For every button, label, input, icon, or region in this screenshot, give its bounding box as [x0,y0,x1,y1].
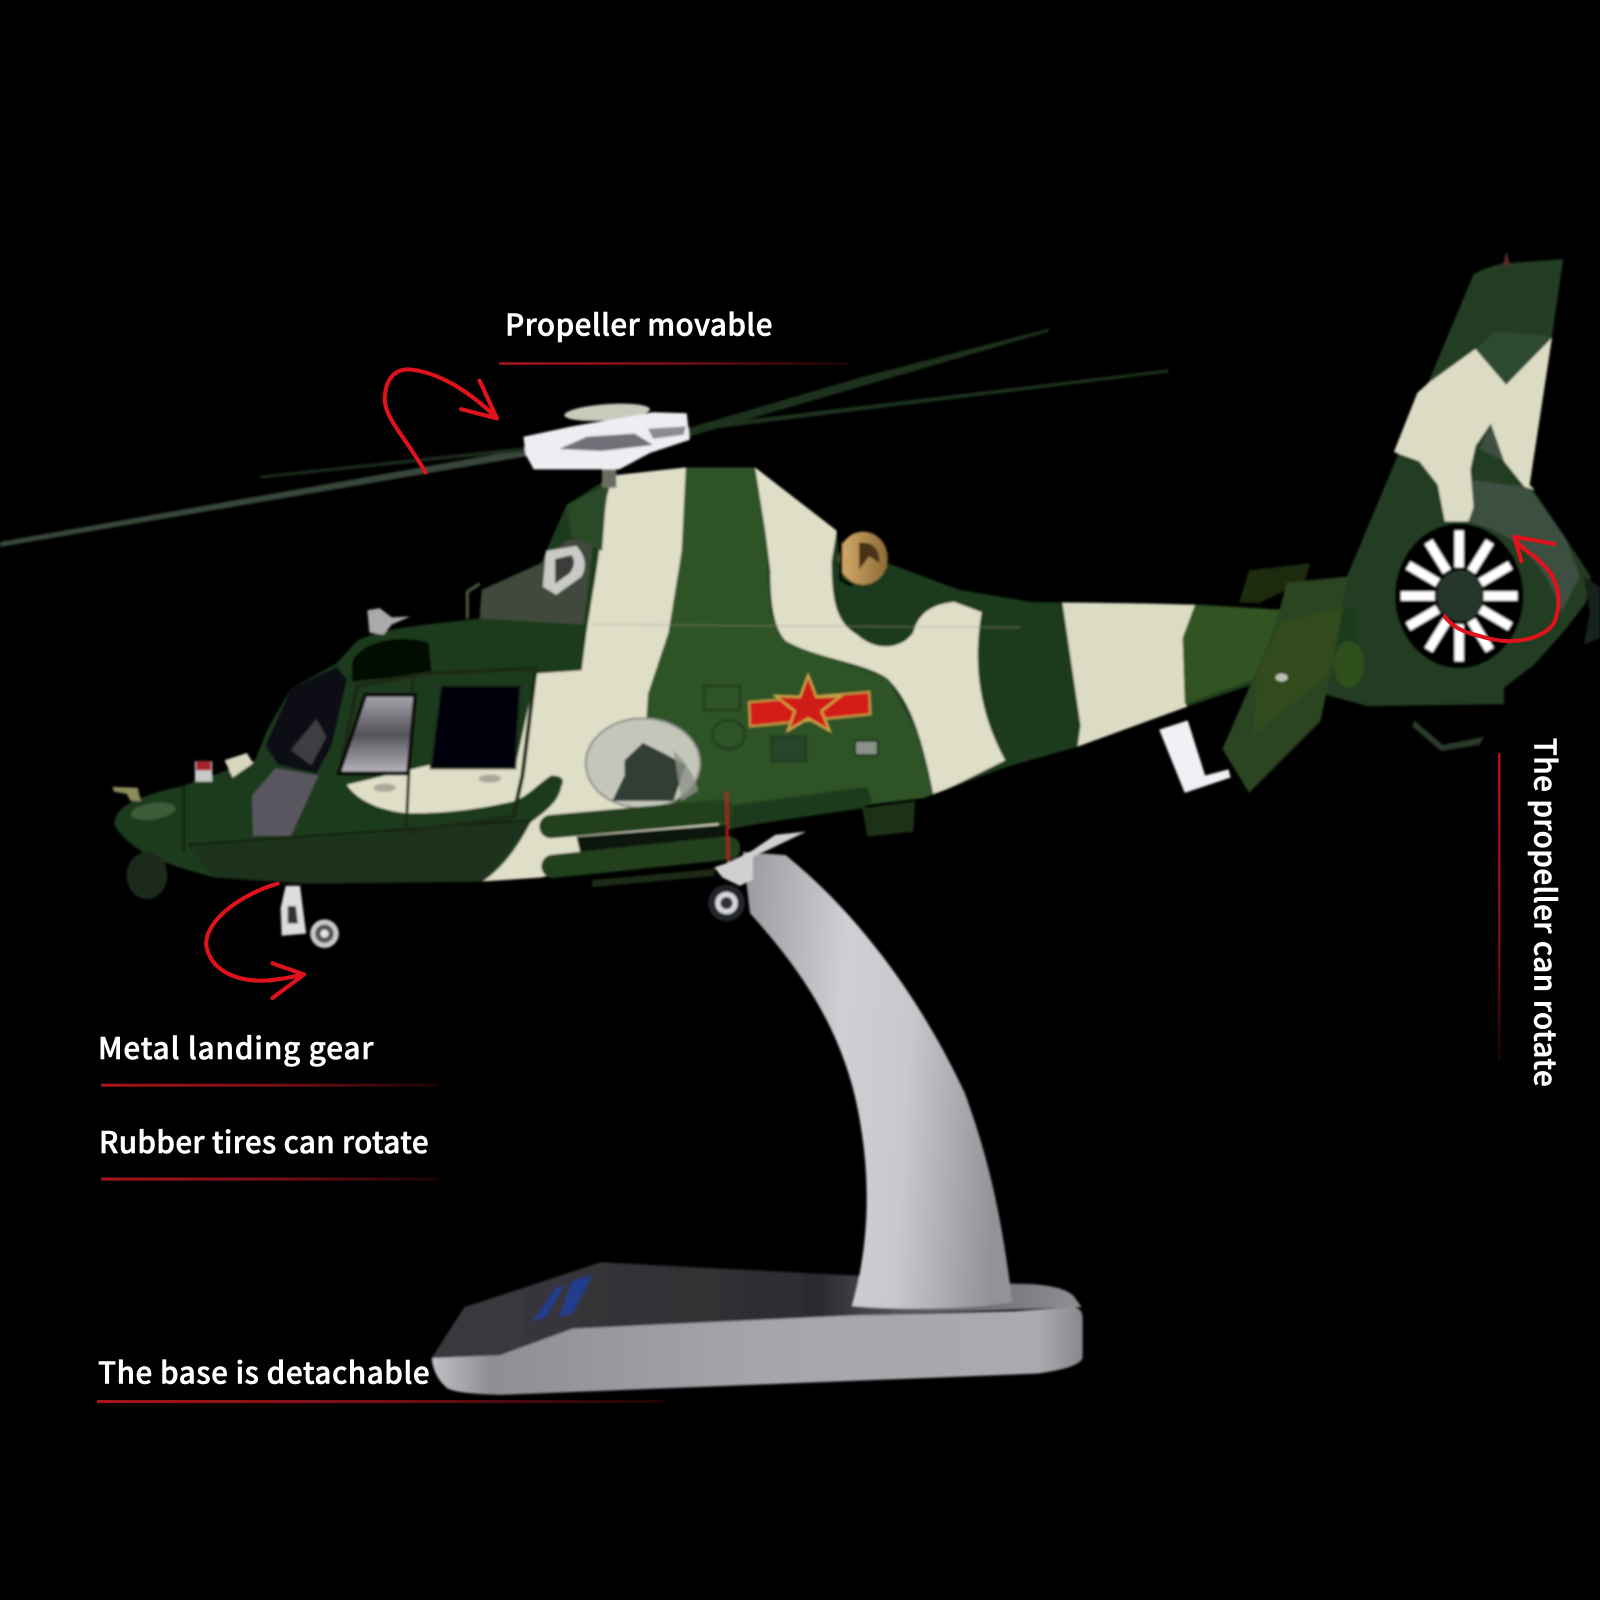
tail bumper [1412,720,1484,751]
front landing gear [281,886,339,948]
door handles [373,784,396,792]
red arrow: tail rotor rotation [1445,537,1559,641]
main rotor blades [0,329,1168,547]
vertical line: tail propeller [1498,753,1501,1061]
tail fin [1286,259,1591,706]
door frame [339,668,536,832]
horizontal stabilizer [1222,577,1348,793]
red arrow: rotor rotation [385,369,497,472]
underline: base [97,1400,663,1403]
tail fin camouflage [1394,338,1552,521]
engine exhaust [839,532,888,586]
rotor hub [523,401,690,488]
rear canopy panel [480,536,594,624]
small panel details [704,686,878,761]
display stand [432,852,1083,1395]
antenna [1503,251,1510,265]
white rear skid [1159,720,1231,793]
stand arm [743,852,1012,1309]
mirror antenna [367,608,410,635]
rear canopy handle and vent [467,546,585,618]
nose fittings [112,753,253,899]
nose highlight [130,802,176,821]
missile pods [551,788,915,884]
underline: metal landing gear [101,1084,439,1087]
label: metal landing gear: Metal landing gear [98,1025,374,1068]
tail rudder bulge [1334,641,1364,688]
upper windscreen [265,666,347,773]
center green panel [641,467,934,837]
lower windscreen [252,768,318,836]
label: rubber tires can rotate: Rubber tires can rotate [99,1119,429,1162]
underline: rubber tires [101,1178,439,1181]
bubble window with figure [586,718,700,808]
label: tail propeller can rotate: The propeller can rotate [1526,738,1569,1087]
helicopter model [0,251,1600,948]
label: base is detachable: The base is detachable [98,1350,430,1393]
aft cream stripe [755,467,1005,796]
underline: propeller movable [499,362,848,365]
lower belly shade [189,822,531,884]
roof green shoulder [566,485,607,551]
tail boom green band [1183,605,1286,704]
tail fan [1395,523,1523,668]
panel line [592,624,1020,628]
stand base top face [432,1262,1082,1358]
blue base marking [533,1276,592,1321]
forward cream stripe [347,467,727,884]
front door window [339,695,415,773]
roof black canopy [352,639,432,682]
fan duct shading [1469,480,1580,612]
fuselage [113,466,1280,885]
tail rotor gearbox [1584,577,1600,645]
stand base front face [432,1307,1083,1395]
tail boom cream band [1062,601,1195,747]
insignia [749,676,870,731]
cockpit windows [252,666,536,836]
upper stabilizer shadow [1239,563,1310,603]
rear door window [431,686,520,768]
red arrow: landing gear rotation [206,884,304,998]
label: propeller movable: Propeller movable [505,302,772,345]
main landing gear [708,832,806,921]
